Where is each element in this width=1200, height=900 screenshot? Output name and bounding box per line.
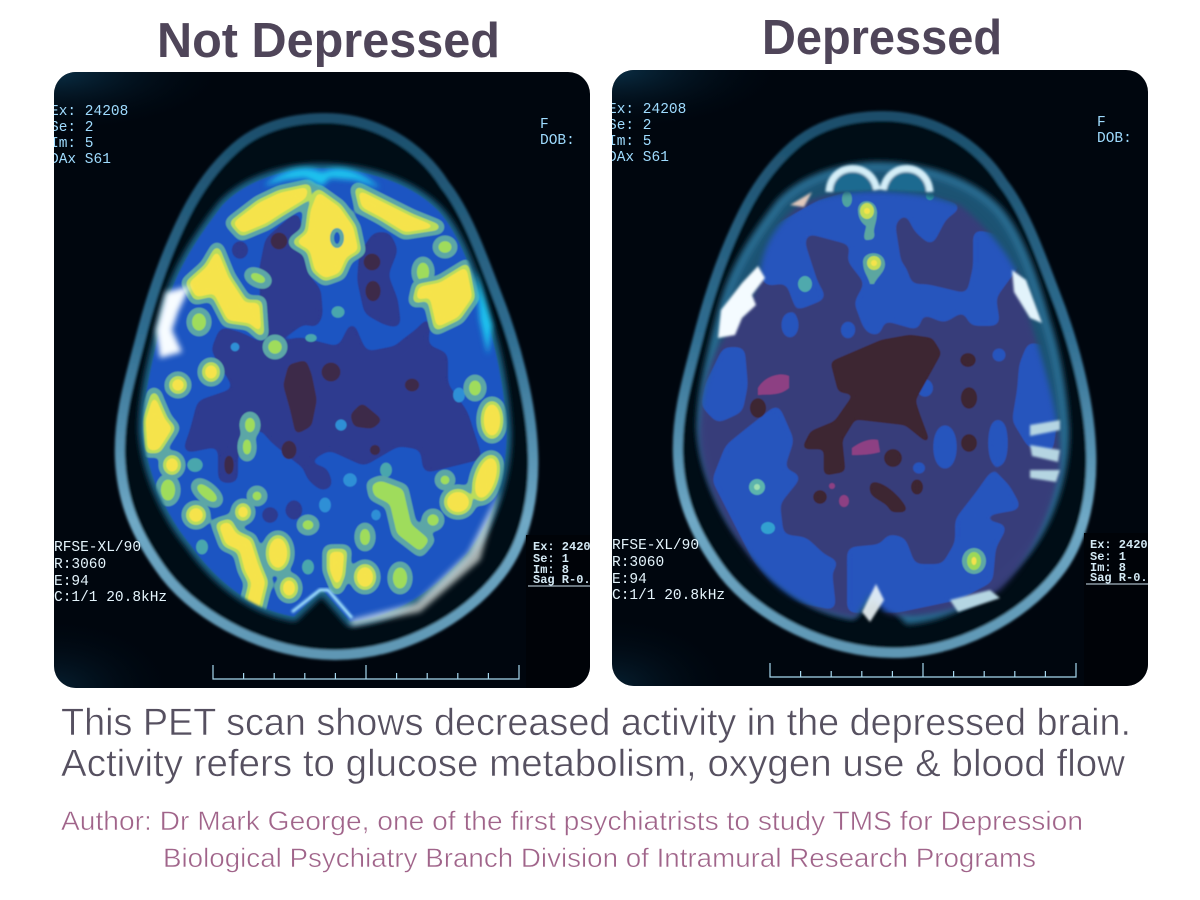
panel: not depressed PET scan — [0, 12, 591, 758]
scan text: lower right: Ex: 2420 — [533, 540, 591, 554]
scan text: lower right: Im: 8 — [1090, 561, 1126, 575]
scan text: lower left: E:94 — [612, 572, 647, 588]
author credit: Author: Dr Mark George, one of the first psychiatrists to study TMS for Depression — [61, 806, 1083, 836]
scan text: lower right: Ex: 2420 — [1090, 538, 1148, 552]
scan text: lower right: Sag R-0. — [533, 573, 591, 587]
heat map — [696, 190, 1062, 620]
title: Depressed: Depressed — [762, 11, 1002, 65]
author credit — [61, 806, 1083, 873]
scan text: lower right — [1086, 538, 1148, 585]
scan text: upper left: Ex: 24208 — [50, 104, 128, 120]
scan text: lower left: C:1/1 20.8kHz — [54, 590, 167, 606]
panel: depressed PET scan — [612, 70, 1148, 686]
scan text: upper right: DOB: — [1097, 131, 1132, 147]
scan text: lower left — [612, 538, 725, 604]
caption text: Activity refers to glucose metabolism, oxygen use & blood flow — [61, 743, 1126, 785]
falx highlight — [292, 590, 352, 618]
scan text: upper left: Im: 5 — [50, 136, 94, 152]
scan text: lower left: RFSE-XL/90 — [54, 540, 141, 556]
author credit: Biological Psychiatry Branch Division of Intramural Research Programs — [163, 843, 1036, 873]
title: Not Depressed: Not Depressed — [157, 14, 500, 68]
scan text: lower right: Sag R-0. — [1090, 571, 1148, 585]
scan text: lower left: R:3060 — [612, 555, 664, 571]
darkest central region — [752, 337, 975, 510]
scan text: upper left — [54, 105, 128, 163]
skull ring and visible cortex — [678, 116, 1091, 653]
scan text: upper right: F — [1097, 115, 1106, 131]
scan text: upper left: Se: 2 — [608, 118, 652, 134]
scan text: lower right: Im: 8 — [533, 563, 569, 577]
caption text: This PET scan shows decreased activity in the depressed brain. — [61, 702, 1131, 744]
teal spots — [749, 191, 934, 534]
darkest spots — [226, 234, 418, 474]
active yellow-green spots — [858, 201, 986, 574]
scan text: upper left: Im: 5 — [608, 134, 652, 150]
caption text — [61, 702, 1131, 785]
scan text: lower left: C:1/1 20.8kHz — [612, 588, 725, 604]
scan text: lower left: RFSE-XL/90 — [612, 538, 699, 554]
scan text: lower left — [54, 540, 167, 606]
blue moderate regions — [704, 193, 1058, 610]
scan text: lower right: Se: 1 — [533, 552, 569, 566]
scan text: lower right: Se: 1 — [1090, 550, 1126, 564]
scan text: upper left: Se: 2 — [50, 120, 94, 136]
pink spots — [758, 374, 880, 507]
indigo low-activity regions — [186, 215, 479, 521]
scan text: upper right — [1098, 116, 1128, 142]
scan text: lower left: E:94 — [54, 574, 89, 590]
scan text: upper left: DAx S61 — [608, 150, 669, 166]
scale ruler — [213, 665, 519, 679]
scan text: upper left: Ex: 24208 — [608, 102, 686, 118]
bright cortex folds — [718, 168, 1060, 622]
scan text: upper right — [541, 118, 572, 144]
indigo base — [696, 192, 1062, 620]
scale ruler — [770, 663, 1076, 677]
skull ring — [120, 118, 533, 655]
high-activity yellow contours — [146, 187, 501, 610]
scan text: upper left: DAx S61 — [50, 152, 111, 168]
heat map — [143, 168, 507, 622]
scan text: upper right: DOB: — [540, 133, 575, 149]
scan text: lower left: R:3060 — [54, 557, 106, 573]
scan text: upper right: F — [540, 117, 549, 133]
scan text: upper left — [612, 103, 686, 161]
scan text: lower right — [528, 540, 591, 587]
teal and cyan spots — [187, 306, 465, 575]
bright cortex edges — [156, 168, 500, 626]
green moderate-activity contours — [162, 242, 480, 588]
